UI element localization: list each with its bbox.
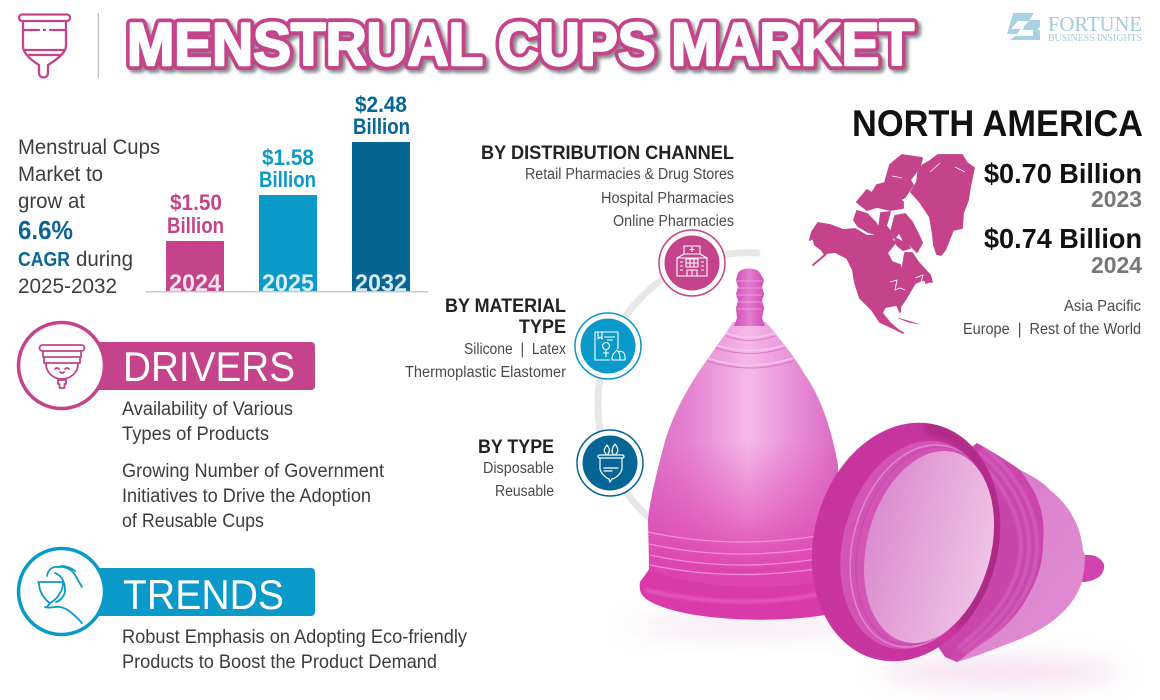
panel: trends [18,548,467,673]
text block: market growth: during [76,248,133,271]
icon: hand holding cup [38,566,82,623]
segment: material type: Thermoplastic Elastomer [405,364,566,381]
segment: material type: TYPE [519,316,566,338]
icon: menstrual cup header [19,14,70,78]
stat: 2024 [984,223,1142,278]
segment: material type: BY MATERIAL [445,295,566,317]
segment: distribution channel: Online Pharmacies [613,213,734,230]
bar: 2032: $2.48 [355,92,407,117]
stat: 2023: $0.70 Billion [984,158,1142,189]
bar: 2032 [352,92,410,297]
panel: north america [810,103,1143,338]
segment: distribution channel: Hospital Pharmacies [601,190,734,207]
segment: material type [405,295,566,381]
segment: distribution channel [481,142,734,230]
bar chart [146,92,428,297]
text block: market growth: grow at [18,190,85,213]
text: other regions: Europe | Rest of the World [963,321,1141,338]
title: MENSTRUAL CUPS MARKET [127,11,914,78]
segment: type: Disposable [483,460,554,477]
text: drivers list: Availability of Various [122,399,293,420]
title: MENSTRUAL CUPS MARKET [127,11,914,78]
bar: 2025: 2025 [262,270,314,297]
logo: Fortune Business Insights [1007,12,1142,44]
icon: hospital [659,230,725,296]
text: drivers list: Growing Number of Government [122,461,385,482]
icon: smiling cup [40,345,84,388]
bar: 2024: 2024 [169,270,222,297]
bar: 2024 [166,190,224,297]
bar: 2025: Billion [259,167,316,192]
text: trends list: Robust Emphasis on Adopting Eco-friendly [122,627,467,648]
text block: market growth: 6.6% [18,215,73,245]
icon: cup with drops [577,430,643,496]
text: drivers list: Types of Products [122,424,269,445]
lying cup [812,422,1104,662]
divider [98,13,99,78]
segment: type: BY TYPE [478,436,554,458]
upright cup [640,268,840,620]
text: drivers list [122,399,385,532]
text: trends list [122,627,467,673]
text block: market growth [18,136,160,298]
segment: distribution channel: Retail Pharmacies & Drug Stores [525,166,734,183]
text: drivers list: Initiatives to Drive the Adoption [122,486,371,507]
map: north america [810,155,974,333]
bar: 2032: Billion [353,114,410,139]
title: MENSTRUAL CUPS MARKET [130,14,917,81]
logo: Fortune Business Insights: FORTUNE [1048,12,1142,36]
bar: 2024: $1.50 [170,190,222,215]
text: other regions [963,298,1141,338]
banner: trends [18,548,315,634]
bar: 2025 [259,145,317,297]
text: other regions: Asia Pacific [1064,298,1141,315]
segment: material type: Silicone | Latex [464,341,566,358]
stat: 2024: 2024 [1091,252,1142,278]
banner: trends: TRENDS [123,571,284,618]
text: trends list: Products to Boost the Product Demand [122,652,437,673]
segment: type [478,436,554,500]
logo: Fortune Business Insights: BUSINESS INSIGHTS [1048,33,1142,44]
heading: region: NORTH AMERICA [852,103,1143,144]
banner: drivers [18,322,315,408]
text block: market growth: Market to [18,163,103,186]
text block: market growth: Menstrual Cups [18,136,160,159]
bar: 2025: $1.58 [262,145,314,170]
cups illustration [625,268,1120,686]
bar: 2032: 2032 [355,270,407,297]
stat: 2024: $0.74 Billion [984,223,1142,254]
arc connector [598,253,757,520]
stat: 2023 [984,158,1142,212]
bar: 2024: Billion [167,213,224,238]
panel: drivers [18,322,385,532]
segment: distribution channel: BY DISTRIBUTION CHANNEL [481,142,734,164]
icon: material book [575,313,641,379]
stat: 2023: 2023 [1091,186,1142,212]
banner: drivers: DRIVERS [123,343,295,390]
text block: market growth: 2025-2032 [18,275,117,298]
segment: type: Reusable [495,483,554,500]
text block: market growth: CAGR [18,249,70,271]
text: drivers list: of Reusable Cups [122,511,264,532]
